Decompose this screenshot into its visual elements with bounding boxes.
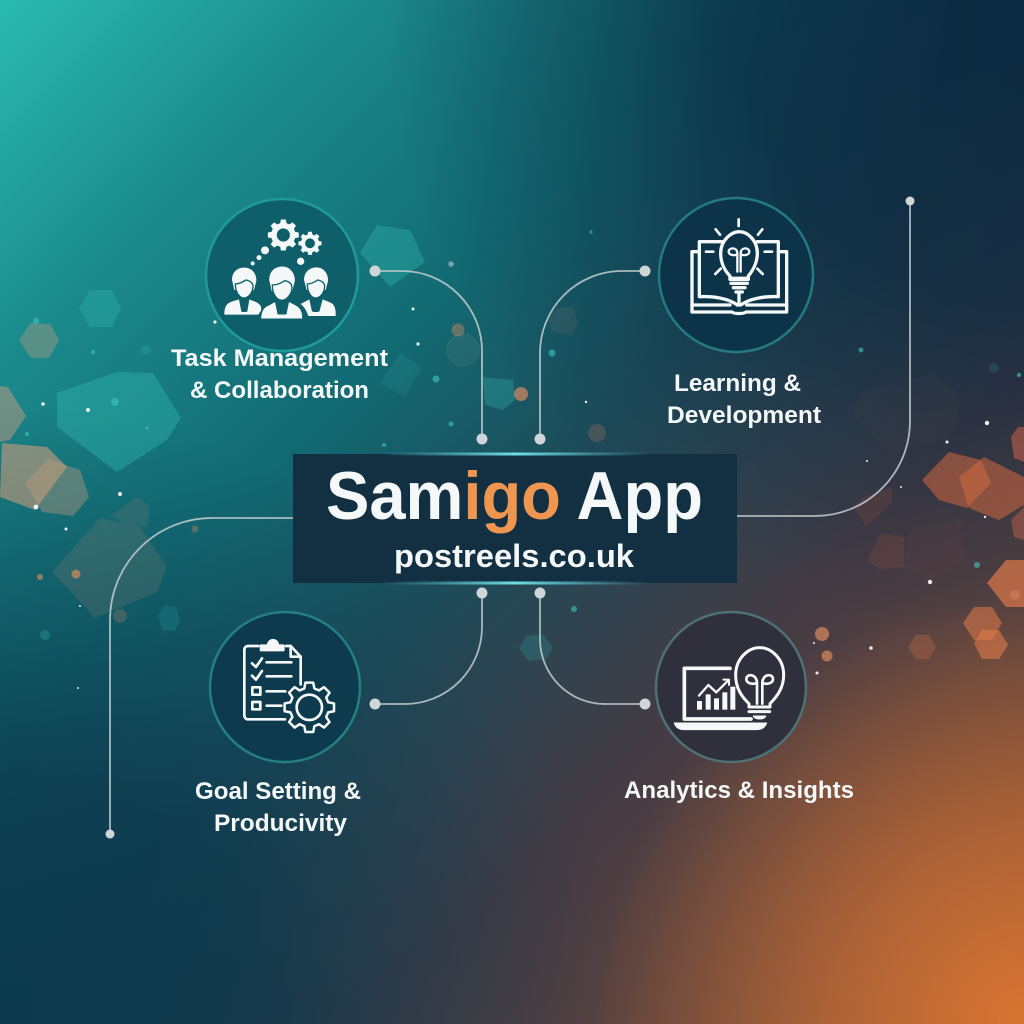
label: learning: Learning &	[674, 370, 801, 397]
label: task management: Task Management	[171, 345, 388, 372]
label: analytics: Analytics & Insights	[624, 777, 854, 804]
middle person	[261, 266, 303, 319]
panel: analytics	[656, 612, 806, 762]
label: collaboration: & Collaboration	[190, 377, 369, 404]
icon: laptop chart with bulb	[674, 648, 784, 730]
right person	[301, 267, 336, 316]
background hexagons	[0, 225, 1024, 661]
connector lines	[110, 201, 910, 834]
icon: book with light bulb	[692, 219, 787, 313]
connector end dots	[106, 196, 914, 838]
background particles	[25, 230, 1021, 689]
label: development: Development	[667, 402, 821, 429]
icon: team with gears	[224, 220, 336, 319]
icon: clipboard with gear	[244, 640, 334, 732]
panel: learning	[659, 198, 813, 352]
left person	[224, 268, 261, 315]
title: Samigo App: Samigo App	[326, 458, 703, 534]
panel: goal setting	[210, 612, 360, 762]
panel: task management	[206, 199, 358, 351]
label: goal setting: Goal Setting &	[195, 778, 361, 805]
panel: central title	[293, 452, 737, 584]
label: producivity: Producivity	[214, 810, 348, 837]
subtitle: postreels.co.uk: postreels.co.uk	[394, 538, 634, 574]
